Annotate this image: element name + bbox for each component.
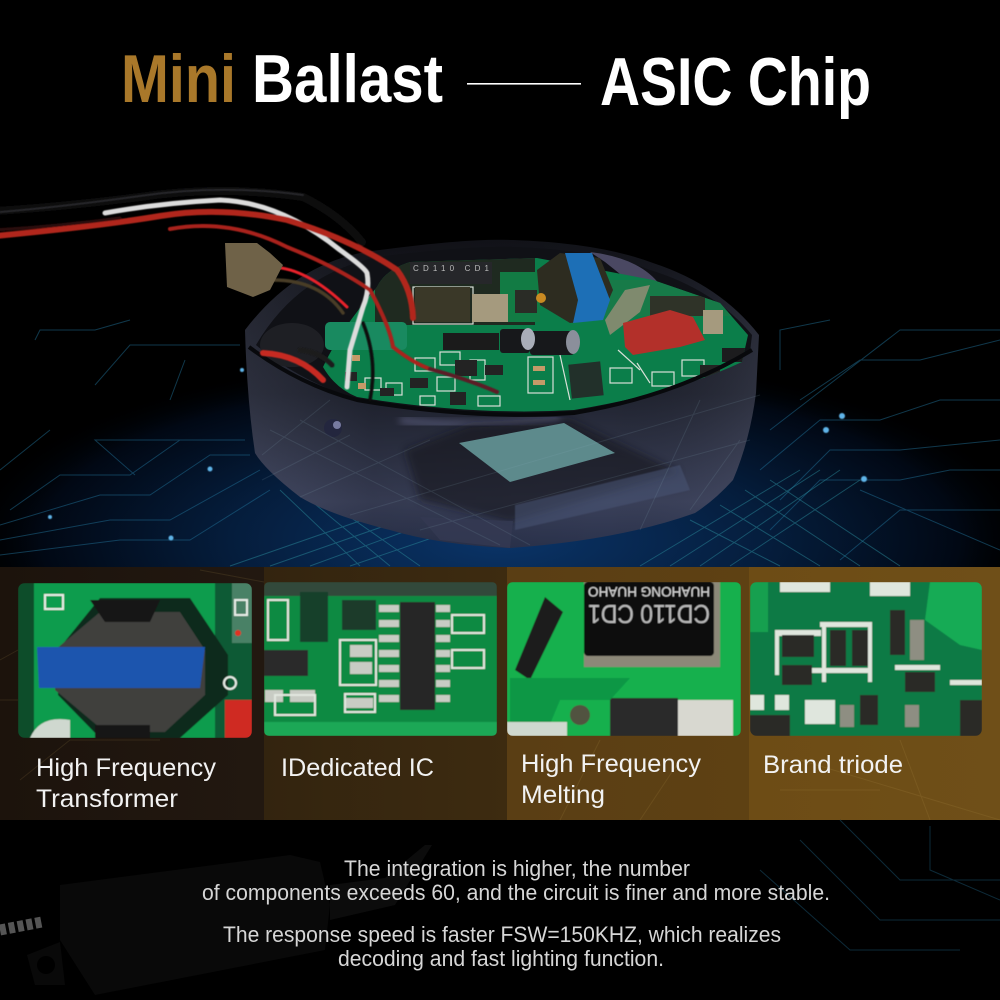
circuit board <box>323 253 750 411</box>
label: dedicated IC: IDedicated IC <box>281 754 434 782</box>
photo: IC board <box>264 582 497 736</box>
capacitor text: CD110 CD1 <box>413 264 490 273</box>
paragraph 1: The integration is higher, the number <box>344 856 690 881</box>
paragraph 1 <box>202 856 830 905</box>
photo: capacitor: HUAHONG HUAHO <box>588 584 710 600</box>
small capacitors <box>500 328 580 355</box>
red wire one <box>0 212 413 318</box>
black wire highlight <box>0 190 303 212</box>
blue band <box>565 253 610 323</box>
label: high frequency transformer <box>36 754 217 813</box>
white wire <box>105 200 368 387</box>
paragraph 2: The response speed is faster FSW=150KHZ, which realizes <box>223 922 781 947</box>
mosfet <box>415 287 470 322</box>
device rim edge <box>249 347 752 415</box>
photo: capacitor <box>507 582 741 736</box>
title connector line <box>467 83 581 85</box>
diode <box>443 333 499 350</box>
perspective circuit grid <box>230 470 900 566</box>
feature band <box>0 567 1000 820</box>
title <box>121 41 871 120</box>
paragraph 2: decoding and fast lighting function. <box>338 946 664 971</box>
band circuit lines <box>0 570 1000 820</box>
circuit pattern background <box>0 320 1000 560</box>
screw <box>324 419 342 437</box>
panel: high frequency melting <box>507 582 741 809</box>
photo: transformer <box>18 583 252 738</box>
photo: triode board <box>750 582 982 736</box>
lower lip highlight <box>515 465 690 530</box>
device window <box>459 423 615 482</box>
ballast device photo <box>0 190 760 548</box>
label: high frequency melting <box>521 750 702 809</box>
paragraph 1: of components exceeds 60, and the circuit is finer and more stable. <box>202 880 830 905</box>
black stub wire <box>300 350 332 365</box>
black wire <box>0 191 362 242</box>
maroon wire end <box>430 369 497 392</box>
red wire two <box>170 226 430 369</box>
photo: capacitor: CD110 CD1 <box>588 599 710 629</box>
device body <box>245 240 759 548</box>
label: high frequency melting: High Frequency <box>521 750 702 778</box>
brown wire <box>273 280 343 313</box>
lead piece <box>605 285 650 335</box>
panel: dedicated IC <box>264 582 497 782</box>
title word: Mini: Mini <box>121 41 236 117</box>
wire connector <box>225 243 283 297</box>
fine red wire <box>272 267 347 307</box>
red stub wire <box>263 353 323 380</box>
device inner cavity <box>256 247 752 415</box>
green cylinder <box>325 322 407 350</box>
description text <box>202 856 830 971</box>
label: high frequency transformer: Transformer <box>36 785 178 813</box>
back lid reflection <box>590 252 660 290</box>
title word: Ballast: Ballast <box>252 41 443 117</box>
glowing circuit nodes <box>48 368 867 540</box>
rim highlight <box>400 418 560 425</box>
ghost ballast silhouette <box>0 845 432 995</box>
thin black wire <box>363 323 373 400</box>
label: high frequency transformer: High Frequency <box>36 754 217 782</box>
dark module behind window <box>405 420 680 522</box>
braided cord <box>0 922 42 930</box>
ic chip <box>568 361 604 399</box>
grid lines over device <box>262 395 760 545</box>
label: brand triode: Brand triode <box>763 751 903 779</box>
background glow <box>0 300 1000 570</box>
bottom right circuit trace <box>760 820 1000 950</box>
panel: brand triode <box>750 582 982 779</box>
transformer <box>537 253 613 323</box>
paragraph 2 <box>223 922 781 971</box>
bottom notch <box>420 517 513 548</box>
capacitor CD110 label <box>410 262 492 284</box>
label: high frequency melting: Melting <box>521 781 605 809</box>
transformer orange dot <box>536 293 546 303</box>
panel: high frequency transformer <box>18 583 252 813</box>
red capacitor <box>623 310 705 355</box>
wires <box>0 190 497 400</box>
dark wire <box>0 218 120 230</box>
cavity blob <box>260 323 324 367</box>
title words: ASIC Chip: ASIC Chip <box>600 44 871 120</box>
silver heat tab <box>472 294 508 322</box>
